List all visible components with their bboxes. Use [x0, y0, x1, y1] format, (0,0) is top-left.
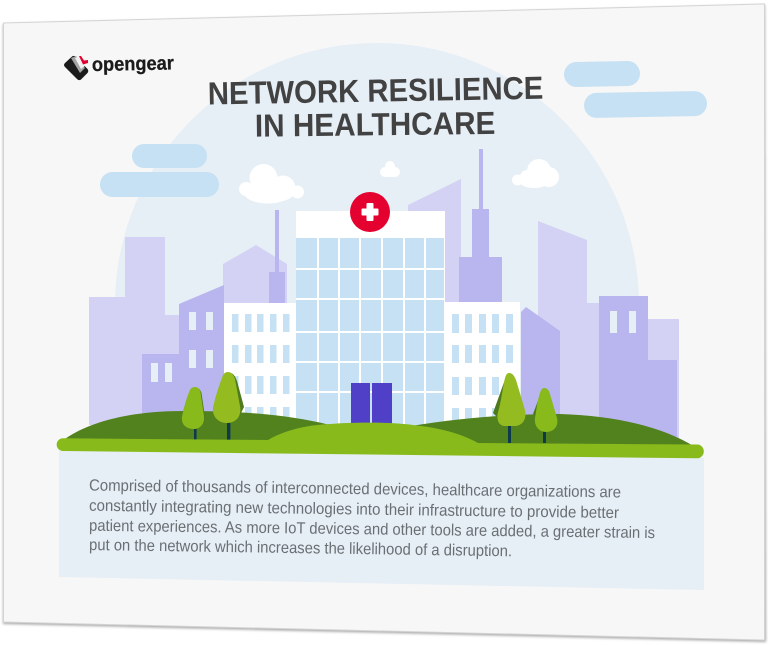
ground strip and center hill: [57, 423, 704, 458]
blue clouds left: [100, 144, 219, 197]
body text: Comprised of thousands of interconnected devices, healthcare organizations are: [89, 477, 621, 501]
blue clouds right: [564, 61, 707, 118]
body text: constantly integrating new technologies into their infrastructure to provide better: [89, 497, 620, 522]
info panel: [59, 451, 704, 590]
title: [207, 70, 544, 144]
hospital doors: [351, 383, 392, 427]
hospital glass facade: [296, 237, 445, 432]
tree left small: [182, 387, 205, 440]
hospital roof band: [296, 211, 445, 238]
background skyline right: [408, 179, 679, 439]
body text: patient experiences. As more IoT devices and other tools are added, a greater strain is: [89, 517, 655, 542]
body text: put on the network which increases the likelihood of a disruption.: [89, 536, 512, 560]
title: NETWORK RESILIENCE: [207, 70, 544, 111]
hospital windows grid: [296, 238, 444, 431]
white cloud right: [512, 159, 559, 188]
white building left: [224, 303, 297, 428]
tree right large: [493, 373, 525, 443]
logo: [64, 52, 174, 80]
logo wordmark: opengear: [92, 52, 174, 76]
icon: red cross sign: [350, 192, 390, 232]
logo icon: [64, 56, 88, 80]
body text: [89, 477, 655, 560]
tree left large: [213, 372, 244, 440]
mid building windows right: [610, 311, 636, 333]
white cloud middle: [380, 161, 400, 177]
mid buildings right: [459, 149, 677, 440]
dark green hills: [62, 411, 695, 447]
white building right: [444, 302, 520, 432]
mid buildings left: [142, 210, 285, 425]
mid building windows left: [151, 312, 213, 382]
background circle: [115, 43, 639, 396]
hospital building: [296, 192, 445, 432]
background skyline left: [89, 237, 287, 425]
tree right small: [533, 388, 557, 443]
white cloud left: [239, 164, 304, 204]
title: IN HEALTHCARE: [255, 105, 496, 144]
